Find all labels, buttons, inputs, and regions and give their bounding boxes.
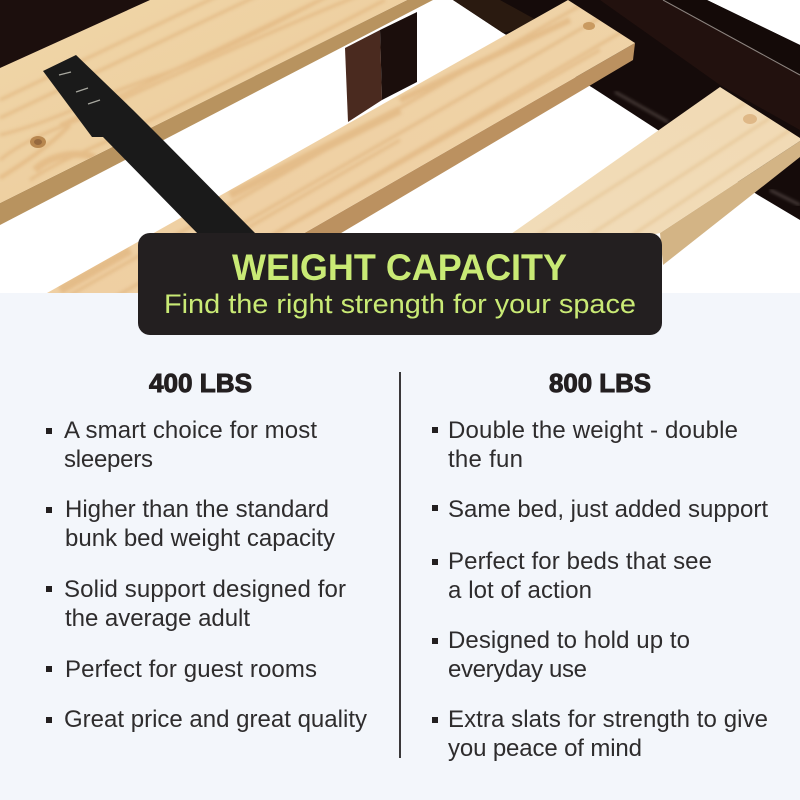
list item — [46, 496, 335, 552]
strap — [43, 55, 258, 236]
list item: a lot of action — [448, 577, 592, 604]
column divider — [399, 372, 401, 758]
list item: Perfect for guest rooms — [65, 656, 317, 683]
column heading: 800 LBS — [549, 368, 651, 398]
frame: leg — [345, 12, 417, 122]
screw hole — [743, 114, 757, 124]
heading: WEIGHT CAPACITY — [232, 247, 567, 288]
list item: A smart choice for most — [64, 417, 317, 444]
list item — [46, 417, 317, 473]
photo: wooden bed slats on dark frame — [0, 0, 800, 300]
subheading: Find the right strength for your space — [164, 289, 636, 319]
list item: the fun — [448, 446, 523, 473]
list item: Same bed, just added support — [448, 496, 768, 523]
list item: Higher than the standard — [65, 496, 329, 523]
list item: you peace of mind — [448, 735, 642, 762]
panel: 400 lbs column — [46, 368, 367, 733]
list item: Designed to hold up to — [448, 627, 690, 654]
frame: right rails — [453, 0, 800, 220]
slat 1 — [0, 0, 433, 225]
list item — [432, 548, 712, 604]
list item: sleepers — [64, 446, 153, 473]
panel: 800 lbs column — [432, 368, 768, 762]
list item — [432, 627, 690, 683]
column heading: 400 LBS — [149, 368, 252, 398]
list item: Perfect for beds that see — [448, 548, 712, 575]
title banner — [138, 233, 662, 335]
list item: Extra slats for strength to give — [448, 706, 768, 733]
list item: Solid support designed for — [64, 576, 346, 603]
slat 3 — [512, 87, 800, 265]
list item — [432, 706, 768, 762]
list item: Double the weight - double — [448, 417, 738, 444]
screw hole — [583, 22, 595, 30]
panel: light background — [0, 293, 800, 800]
list item: bunk bed weight capacity — [65, 525, 335, 552]
list item: the average adult — [65, 605, 250, 632]
list item — [46, 576, 346, 632]
slat 2 — [47, 0, 635, 300]
list item — [432, 417, 738, 473]
knot — [30, 136, 46, 148]
list item: everyday use — [448, 656, 587, 683]
list item: Great price and great quality — [64, 706, 367, 733]
frame: top-left dark rail — [0, 0, 152, 69]
